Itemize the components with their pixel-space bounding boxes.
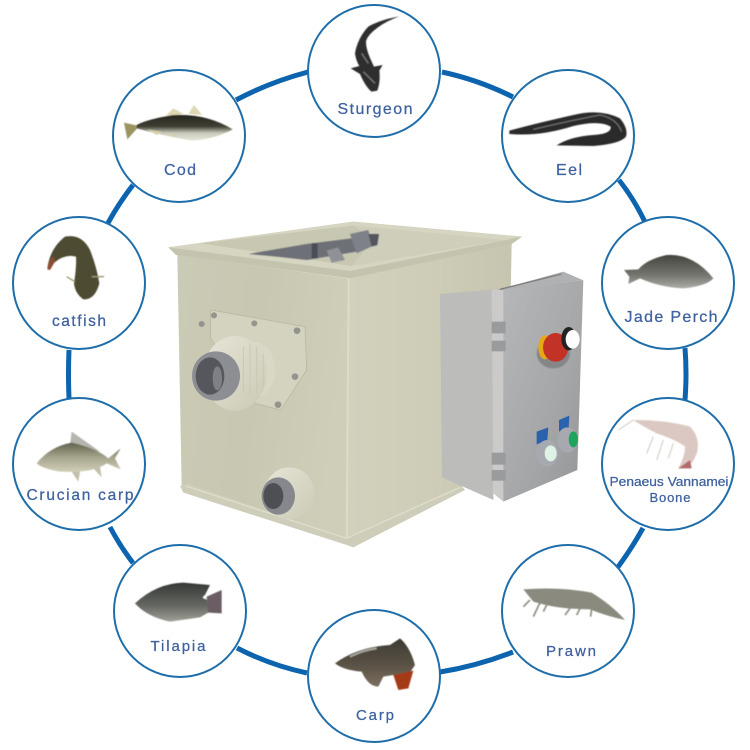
icon: sturgeon [351, 17, 399, 92]
panel: Cod [113, 70, 245, 202]
control box [440, 272, 583, 502]
label: Tilapia: Tilapia [150, 638, 206, 655]
panel: Crucian carp [13, 398, 145, 530]
panel: catfish [13, 217, 145, 349]
icon: prawn [523, 589, 625, 620]
icon: tilapia [135, 583, 222, 622]
panel: Sturgeon [308, 5, 440, 137]
label: Crucian carp: Crucian carp [26, 487, 134, 504]
label: Penaeus Vannamei Boone [610, 474, 729, 505]
panel: Eel [502, 70, 634, 202]
internal pipework [248, 230, 379, 263]
label: Jade Perch: Jade Perch [624, 309, 718, 326]
label: catfish: catfish [52, 313, 106, 330]
connecting ring segments [68, 72, 686, 673]
label: Sturgeon: Sturgeon [338, 101, 412, 118]
large pipe union [192, 336, 275, 411]
central machine: filter tank with control box [168, 222, 583, 547]
emergency stop button [538, 333, 568, 362]
panel: Prawn [502, 545, 634, 677]
label: Penaeus Vannamei Boone: Penaeus Vannamei [610, 474, 729, 489]
icon: whiteleg shrimp [618, 420, 698, 468]
label: Penaeus Vannamei Boone: Boone [650, 490, 690, 505]
label: Prawn: Prawn [546, 643, 596, 660]
label: Carp: Carp [356, 707, 394, 724]
flange plate with bolts [199, 310, 307, 410]
icon: cod [124, 105, 233, 141]
icon: crucian carp [37, 432, 121, 482]
small pipe union [262, 467, 314, 519]
tank body [168, 222, 522, 547]
white indicator light [561, 327, 580, 350]
lower push buttons [536, 416, 578, 467]
label: Eel: Eel [556, 162, 582, 179]
icon: carp [335, 638, 415, 690]
label: Cod: Cod [164, 162, 196, 179]
icon: eel [509, 112, 627, 146]
panel: Carp [308, 610, 440, 742]
panel: Jade Perch [602, 217, 734, 349]
panel: Penaeus Vannamei Boone [602, 398, 734, 530]
panel: Tilapia [114, 545, 246, 677]
icon: catfish [47, 236, 104, 299]
icon: jade perch [624, 255, 713, 288]
